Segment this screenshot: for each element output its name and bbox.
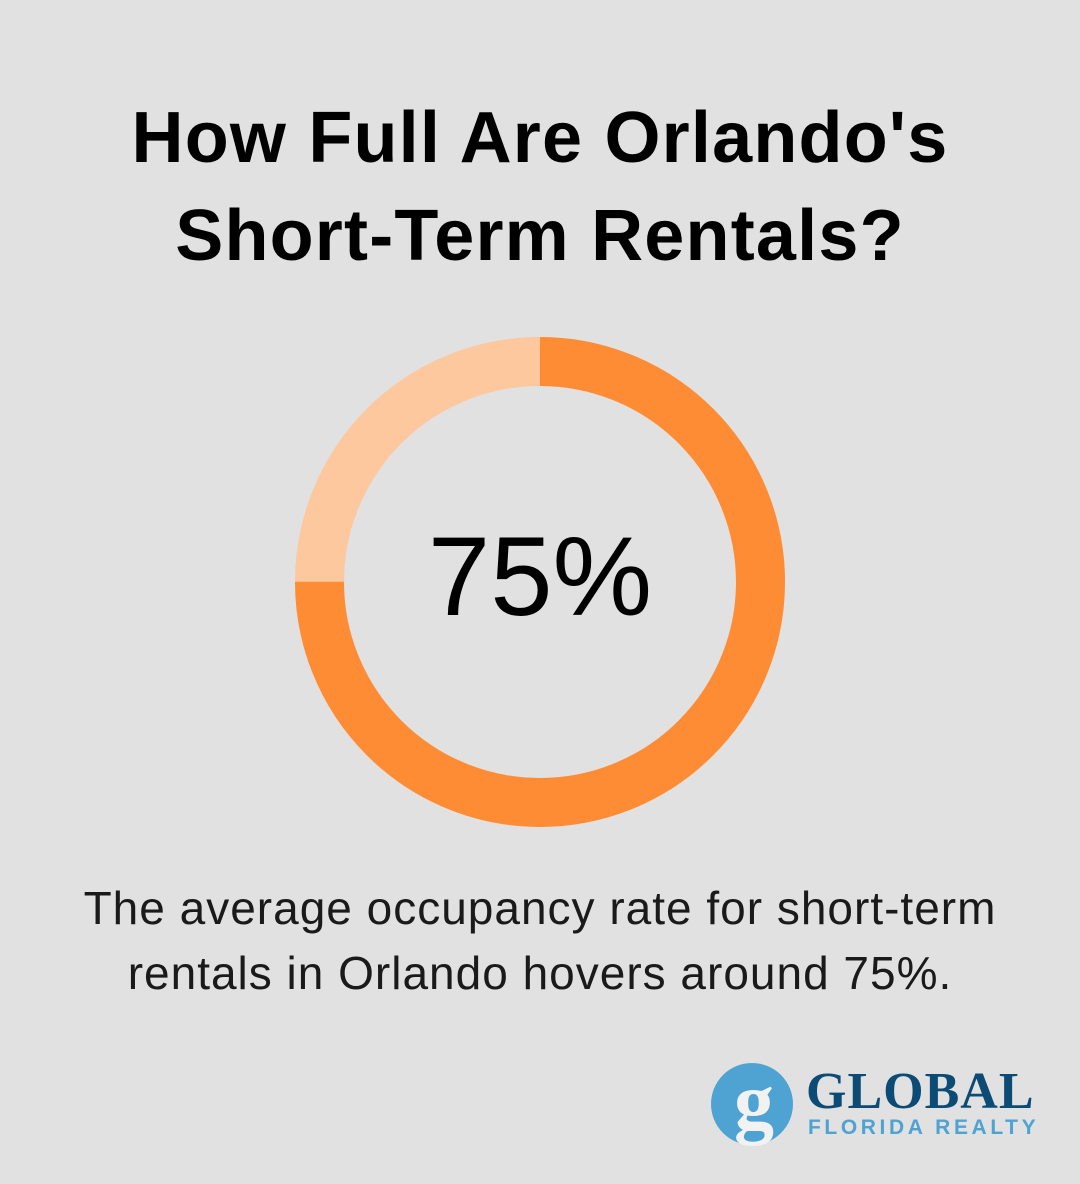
donut chart: 75% bbox=[428, 514, 652, 639]
title: How Full Are Orlando's bbox=[132, 98, 948, 178]
description bbox=[84, 882, 996, 999]
logo bbox=[711, 1062, 1039, 1146]
description: rentals in Orlando hovers around 75%. bbox=[128, 947, 952, 999]
icon: g circle bbox=[711, 1062, 793, 1146]
title bbox=[132, 98, 948, 276]
description: The average occupancy rate for short-term bbox=[84, 882, 996, 934]
title: Short-Term Rentals? bbox=[175, 196, 905, 276]
logo: FLORIDA REALTY bbox=[808, 1116, 1039, 1139]
logo text: GLOBAL bbox=[806, 1063, 1034, 1120]
